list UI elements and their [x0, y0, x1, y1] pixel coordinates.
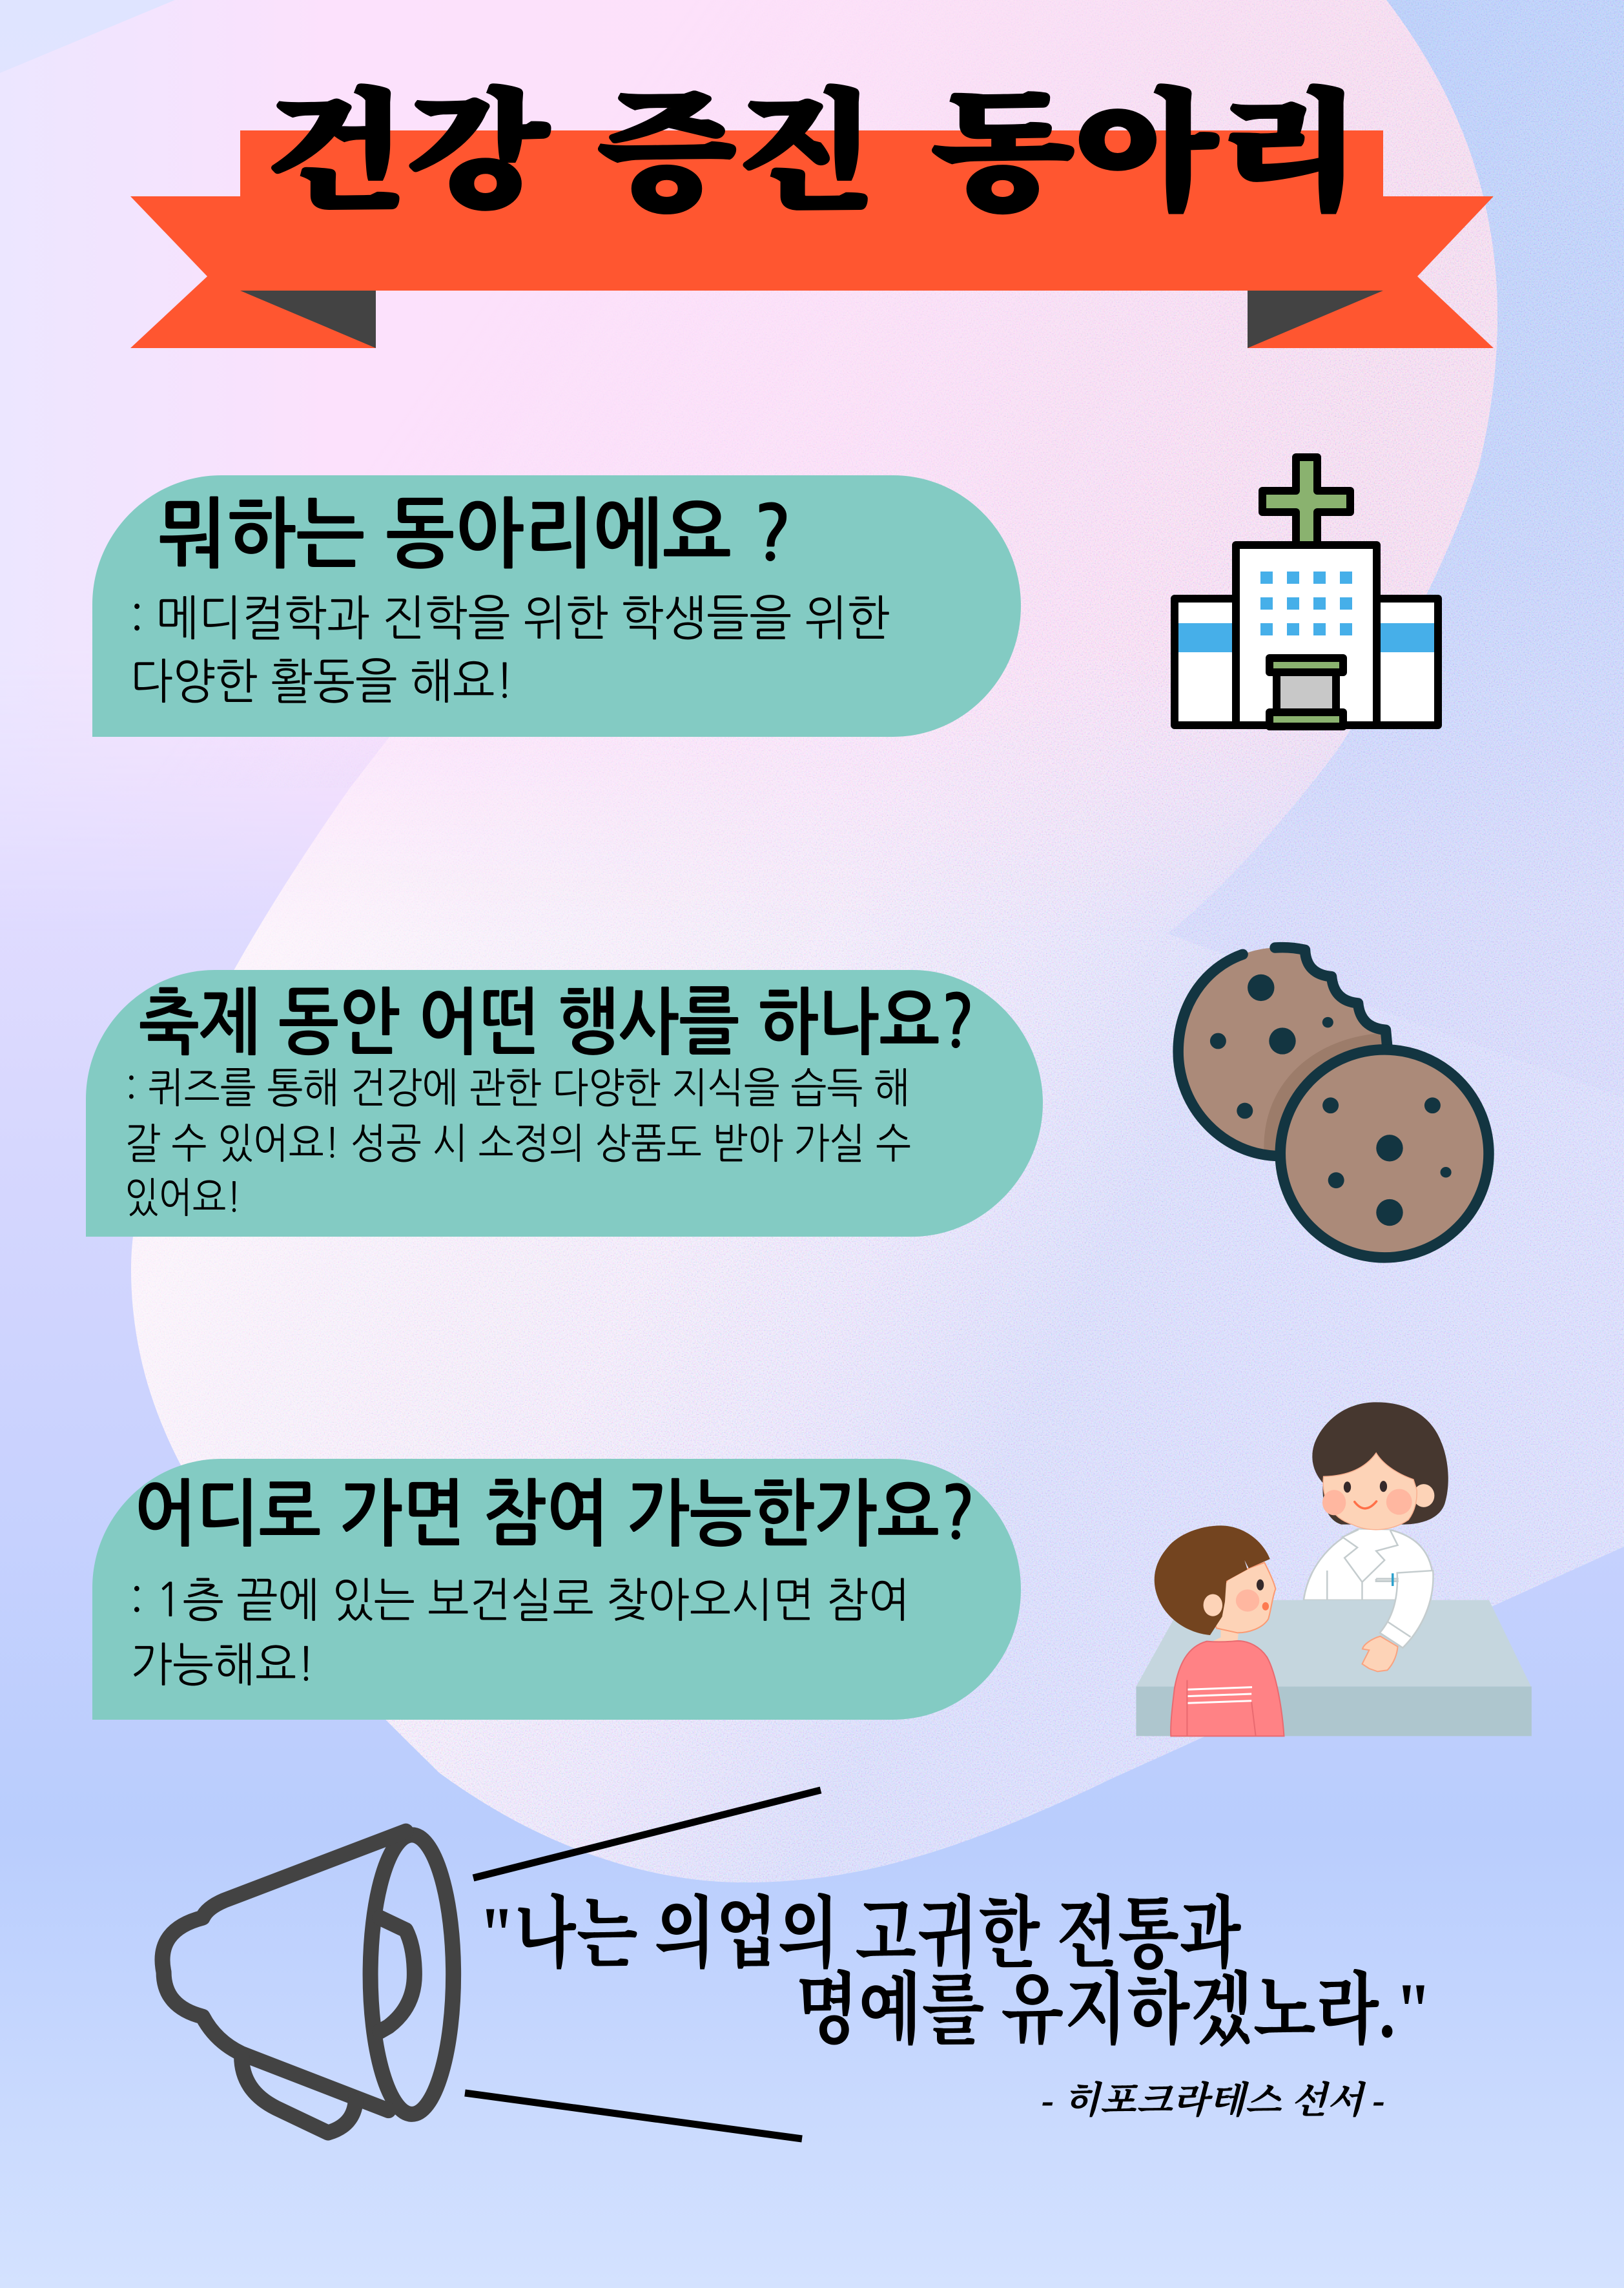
panel: what the club does: : 메디컬학과 진학을 위한 학생들을 위한: [130, 594, 890, 642]
panel: where to participate: 가능해요!: [131, 1642, 315, 1688]
panel: festival events: 있어요!: [125, 1177, 242, 1219]
ribbon banner: [130, 130, 1494, 348]
quote: Hippocratic oath: - 히포크라테스 선서 -: [1042, 2079, 1385, 2121]
panel: festival events: 축제 동안 어떤 행사를 하나요?: [139, 986, 975, 1058]
sound line: upper: [473, 1790, 821, 1878]
panel: what the club does: [92, 475, 1021, 737]
quote: Hippocratic oath: [479, 1891, 1432, 2121]
title: [265, 81, 1361, 226]
panel: where to participate: [92, 1459, 1021, 1720]
panel: festival events: 갈 수 있어요! 성공 시 소정의 상품도 받아 가실 수: [125, 1123, 911, 1164]
quote: Hippocratic oath: "나는 의업의 고귀한 전통과: [479, 1891, 1241, 1978]
panel: where to participate: : 1층 끝에 있는 보건실로 찾아오시면 참여: [130, 1577, 910, 1623]
sound line: lower: [465, 2093, 802, 2139]
title: 동아리: [931, 81, 1361, 226]
title: 증진: [597, 81, 875, 226]
panel: what the club does: 뭐하는 동아리에요 ?: [158, 496, 792, 572]
illustration: doctor and child at a desk: [1136, 1402, 1532, 1736]
quote: Hippocratic oath: 명예를 유지하겠노라.": [796, 1967, 1432, 2054]
icon: megaphone: [163, 1831, 453, 2133]
icon: hospital: [1175, 457, 1438, 727]
panel: festival events: : 퀴즈를 통해 건강에 관한 다양한 지식을 습득 해: [125, 1067, 910, 1109]
panel: where to participate: 어디로 가면 참여 가능한가요?: [134, 1478, 976, 1550]
panel: festival events: [86, 970, 1043, 1237]
icon: cookies: [1178, 947, 1489, 1257]
title: 건강: [265, 81, 550, 226]
panel: what the club does: 다양한 활동을 해요!: [130, 657, 514, 705]
